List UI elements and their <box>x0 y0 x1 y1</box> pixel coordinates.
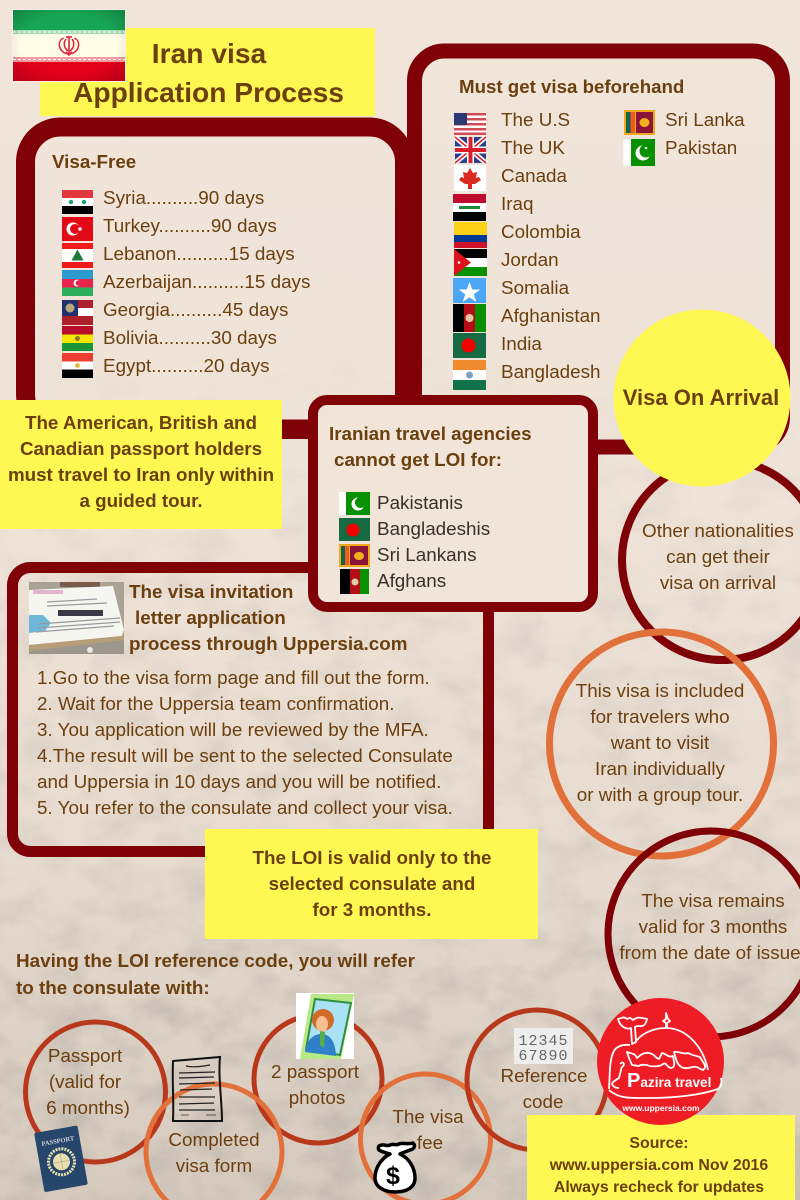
icon: money bag <box>375 1143 415 1192</box>
LOI nationality list: Afghans <box>377 570 446 591</box>
title text <box>73 37 344 108</box>
icon: visa form document <box>173 1057 222 1121</box>
icon: portrait photo <box>296 993 354 1059</box>
circle: the visa fee <box>360 1074 490 1200</box>
circle: other nationalities: Other nationalities <box>642 520 794 541</box>
circle: other nationalities: can get their <box>666 546 770 567</box>
circle: passport: (valid for <box>49 1071 121 1092</box>
LOI flags <box>339 492 370 594</box>
process steps: 1.Go to the visa form page and fill out the form. <box>37 667 430 688</box>
source box: www.uppersia.com Nov 2016 <box>549 1157 768 1174</box>
title text: Iran visa <box>152 37 267 69</box>
circle: passport: Passport <box>48 1045 123 1066</box>
callout: guided tour <box>0 400 282 529</box>
circle: completed visa form: Completed <box>168 1129 260 1150</box>
circle: passport: 6 months) <box>46 1097 130 1118</box>
icon: Iran flag <box>12 10 126 82</box>
process steps: 5. You refer to the consulate and collect your visa. <box>37 797 453 818</box>
country list column one <box>501 109 601 382</box>
process steps: and Uppersia in 10 days and you will be notified. <box>37 771 441 792</box>
country list column two: Sri Lanka <box>665 109 745 130</box>
panel: iranian travel agencies <box>313 400 593 607</box>
connector bars <box>280 420 620 454</box>
country list column one: The U.S <box>501 109 570 130</box>
logo: Pazira travel: Pazira travel <box>627 1070 711 1092</box>
heading: invitation letter process: process through Uppersia.com <box>129 633 408 654</box>
title text: Application Process <box>73 76 344 108</box>
callout: guided tour: must travel to Iran only within <box>8 464 274 485</box>
country list column one: Jordan <box>501 249 559 270</box>
circle: visa on arrival: Visa On Arrival <box>623 385 779 410</box>
country list column one: The UK <box>501 137 565 158</box>
visa-free country list: Bolivia..........30 days <box>103 327 277 348</box>
circle: visa validity: valid for 3 months <box>639 916 787 937</box>
circle: other nationalities <box>622 460 800 660</box>
circle: 2 passport photos: 2 passport <box>271 1061 360 1082</box>
heading: invitation letter process <box>129 581 408 654</box>
heading: required documents: to the consulate with: <box>16 977 210 998</box>
heading: required documents: Having the LOI reference code, you will refer <box>16 950 416 971</box>
callout: LOI validity: for 3 months. <box>313 899 431 920</box>
circle: other nationalities: visa on arrival <box>660 572 776 593</box>
heading: invitation letter process: The visa invitation <box>129 581 293 602</box>
country list column one: Iraq <box>501 193 533 214</box>
heading: cannot get LOI: Iranian travel agencies <box>329 423 532 444</box>
country list column one: India <box>501 333 542 354</box>
callout: LOI validity: The LOI is valid only to the <box>253 847 491 868</box>
process steps: 2. Wait for the Uppersia team confirmation. <box>37 693 394 714</box>
LOI nationality list <box>377 492 490 591</box>
circle: visa validity: The visa remains <box>641 890 785 911</box>
icon: money bag: $ <box>386 1162 400 1190</box>
visa-free country list <box>103 187 310 376</box>
source box <box>527 1115 795 1200</box>
title banner <box>40 28 375 116</box>
icon: passport <box>34 1125 88 1192</box>
source box: Always recheck for updates <box>554 1179 764 1196</box>
visa-free country list: Azerbaijan..........15 days <box>103 271 310 292</box>
visa-free country list: Syria..........90 days <box>103 187 264 208</box>
country list column two: Pakistan <box>665 137 737 158</box>
textured background <box>0 471 800 1200</box>
circle: reference code <box>467 1010 607 1150</box>
LOI nationality list: Sri Lankans <box>377 544 477 565</box>
circle: the visa fee: fee <box>417 1132 443 1153</box>
process steps: 4.The result will be sent to the selected Consulate <box>37 745 453 766</box>
process steps <box>37 667 453 818</box>
LOI nationality list: Pakistanis <box>377 492 463 513</box>
visa-free country list: Egypt..........20 days <box>103 355 270 376</box>
circle: completed visa form <box>146 1084 282 1200</box>
source box: Source: <box>629 1135 689 1152</box>
circle: visa for travelers: Iran individually <box>595 758 726 779</box>
icon: reference digits <box>514 1028 573 1065</box>
visa-free country list: Georgia..........45 days <box>103 299 288 320</box>
visa-free flags <box>62 190 93 378</box>
country list column one: Canada <box>501 165 568 186</box>
country list column one: Bangladesh <box>501 361 601 382</box>
country list column two <box>665 109 745 158</box>
heading: required documents <box>16 950 416 998</box>
heading: invitation letter process: letter application <box>135 607 286 628</box>
icon: passport: PASSPORT <box>41 1135 76 1148</box>
circle: visa for travelers: This visa is included <box>576 680 744 701</box>
icon: reference digits: 67890 <box>518 1048 569 1065</box>
circle: completed visa form: visa form <box>176 1155 252 1176</box>
country list column one: Colombia <box>501 221 581 242</box>
panel: visa-free <box>26 127 404 429</box>
flags column two <box>623 110 655 166</box>
flags column one <box>453 113 487 390</box>
callout: guided tour: a guided tour. <box>79 490 203 511</box>
panel: must get visa beforehand <box>414 51 782 447</box>
logo: Pazira travel <box>597 998 724 1125</box>
panel: visa invitation letter process <box>12 568 488 852</box>
heading: cannot get LOI: cannot get LOI for: <box>334 449 502 470</box>
heading: must get visa beforehand: Must get visa beforehand <box>459 76 684 97</box>
circle: visa validity <box>608 831 800 1037</box>
circle: visa for travelers: want to visit <box>610 732 710 753</box>
circle: visa for travelers <box>550 632 774 856</box>
circle: reference code: Reference <box>501 1065 587 1086</box>
circle: visa for travelers: or with a group tour. <box>577 784 743 805</box>
circle: 2 passport photos <box>254 1015 382 1143</box>
callout: guided tour: The American, British and <box>25 412 257 433</box>
country list column one: Afghanistan <box>501 305 601 326</box>
circle: the visa fee: The visa <box>392 1106 464 1127</box>
circle: visa on arrival <box>614 310 790 486</box>
heading: cannot get LOI <box>329 423 532 470</box>
callout: LOI validity: selected consulate and <box>269 873 475 894</box>
visa-free country list: Turkey..........90 days <box>103 215 277 236</box>
LOI nationality list: Bangladeshis <box>377 518 490 539</box>
visa-free country list: Lebanon..........15 days <box>103 243 295 264</box>
logo: Pazira travel: www.uppersia.com <box>621 1103 700 1113</box>
circle: 2 passport photos: photos <box>289 1087 345 1108</box>
photo: invitation letter <box>29 582 124 654</box>
circle: visa validity: from the date of issue <box>619 942 800 963</box>
circle: passport <box>26 1022 166 1162</box>
heading: visa-free: Visa-Free <box>52 151 136 172</box>
country list column one: Somalia <box>501 277 570 298</box>
process steps: 3. You application will be reviewed by the MFA. <box>37 719 429 740</box>
icon: reference digits: 12345 <box>518 1033 569 1050</box>
circle: visa for travelers: for travelers who <box>590 706 730 727</box>
callout: guided tour: Canadian passport holders <box>20 438 262 459</box>
callout: LOI validity <box>205 829 538 939</box>
circle: reference code: code <box>523 1091 563 1112</box>
